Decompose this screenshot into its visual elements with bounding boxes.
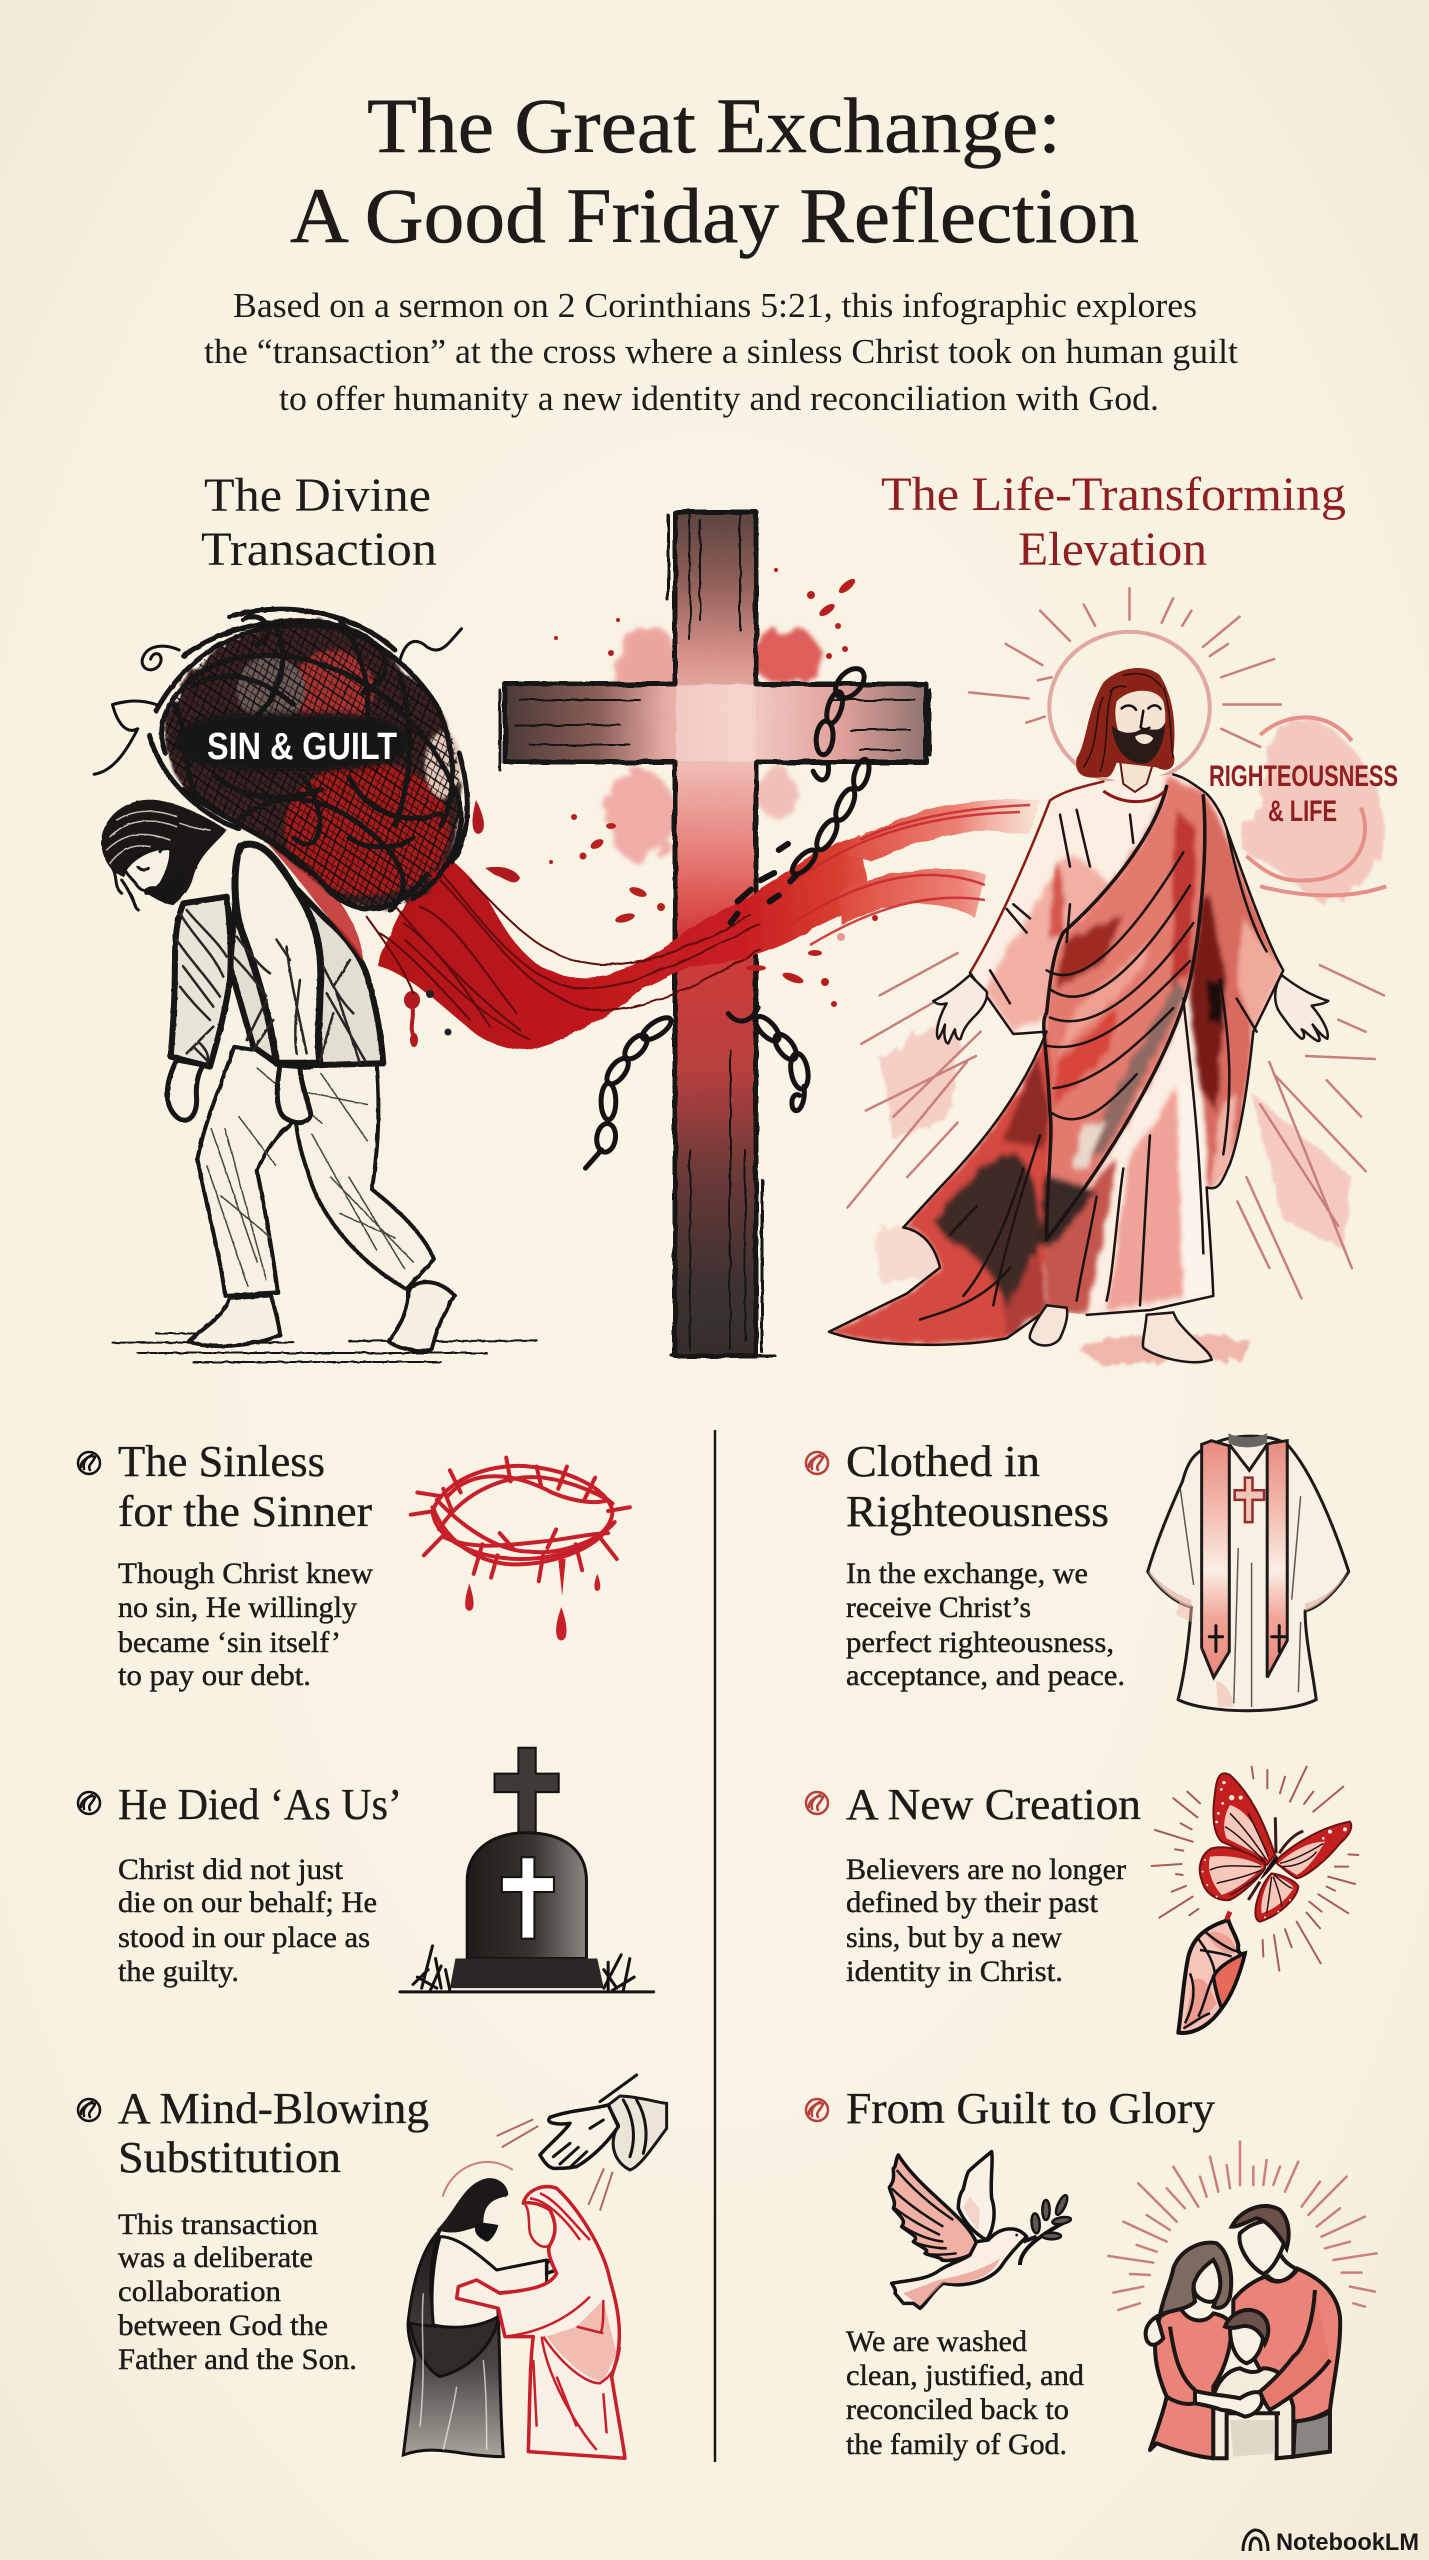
icon: tombstone with cross [400, 1748, 654, 1992]
far sleeve [171, 897, 231, 1067]
upper pale ribbon [840, 799, 1040, 862]
point: He Died As Us: the guilty. [118, 1955, 239, 1988]
finger and cuff lines [553, 2075, 646, 2167]
intro text block [204, 286, 1238, 418]
beard [147, 863, 184, 905]
child hair [1225, 2310, 1268, 2343]
woman hair [1160, 2243, 1231, 2315]
rays [848, 588, 1384, 1298]
chest cross [1235, 1478, 1264, 1522]
beard [1112, 723, 1165, 764]
chrysalis [1178, 1920, 1245, 2033]
loose threads [94, 629, 461, 774]
sash [1045, 777, 1204, 1239]
face [1115, 691, 1165, 751]
body and tail [892, 2229, 1027, 2308]
halo, rays and washes [848, 588, 1386, 1365]
bullet icon [806, 1792, 828, 1814]
stream wash [377, 835, 870, 1050]
ground lines [113, 1334, 537, 1362]
panel: right column points [806, 1437, 1215, 2461]
center divider [714, 1430, 716, 2462]
neckline [1229, 1444, 1267, 1470]
woman hand on man's shoulder [1146, 2317, 1163, 2345]
point: He Died As Us: stood in our place as [118, 1921, 370, 1954]
neck [1120, 760, 1153, 792]
facial features [1122, 705, 1161, 729]
hair strands [1083, 674, 1173, 772]
point: A Mind-Blowing Substitution: This transaction [118, 2208, 318, 2241]
veins [1210, 1813, 1323, 1913]
painted robe [823, 767, 1297, 1353]
wing spots [1202, 1781, 1347, 1918]
point: He Died As Us: Christ did not just [118, 1853, 344, 1886]
point: The Sinless for the Sinner: to pay our debt. [118, 1659, 311, 1692]
point: He Died As Us [78, 1780, 402, 1988]
man hair [1232, 2206, 1289, 2248]
stole left [1202, 1441, 1229, 1677]
train [829, 1032, 1051, 1345]
point: A Mind-Blowing Substitution: A Mind-Blowing [118, 2084, 429, 2133]
reaching hand [540, 2105, 618, 2168]
woman arm [1167, 2327, 1195, 2404]
point: The Sinless for the Sinner: Though Christ knew [118, 1557, 373, 1590]
motion strokes [497, 2119, 613, 2211]
stream over the shoulder [260, 835, 517, 1027]
eye [1015, 2234, 1018, 2236]
point: A Mind-Blowing Substitution: Father and the Son. [118, 2343, 357, 2376]
point: A New Creation: defined by their past [846, 1886, 1099, 1919]
robe ink lines [829, 774, 1283, 1345]
stole crosses [1209, 1626, 1286, 1652]
far hand on shoulder [547, 2245, 590, 2273]
woman face [1194, 2260, 1220, 2302]
heading: The Divine Transaction: The Divine [204, 469, 431, 522]
left hand [933, 975, 987, 1043]
point: He Died As Us: He Died ‘As Us’ [118, 1780, 402, 1829]
title: The Great Exchange: [367, 82, 1061, 169]
intro text block: Based on a sermon on 2 Corinthians 5:21, this infographic explores [233, 286, 1197, 325]
title [290, 82, 1139, 259]
halo [1049, 632, 1210, 783]
feet [189, 1295, 280, 1346]
chain: upper right [731, 663, 872, 923]
stream ink lines [390, 850, 760, 1040]
icon: hand from above with two embracing figures [403, 2075, 667, 2458]
neckline [1103, 791, 1165, 802]
point: A New Creation: identity in Christ. [846, 1955, 1063, 1988]
upper-right wing [1277, 1822, 1351, 1878]
halo arc [443, 2162, 513, 2197]
near wing [889, 2155, 977, 2260]
red figure wash [547, 2300, 617, 2382]
point: The Sinless for the Sinner: no sin, He willingly [118, 1591, 357, 1624]
point: The Sinless for the Sinner: The Sinless [118, 1437, 325, 1486]
feather lines [892, 2170, 957, 2255]
logo mark [1243, 2530, 1268, 2551]
point: The Sinless for the Sinner [78, 1437, 373, 1692]
heading: The Divine Transaction: Transaction [201, 523, 437, 576]
point: Clothed in Righteousness [806, 1437, 1125, 1692]
dark mantle [403, 2230, 503, 2457]
point: A Mind-Blowing Substitution: between God the [118, 2309, 328, 2342]
lower pale ribbon [838, 869, 985, 925]
point: From Guilt to Glory: From Guilt to Glory [846, 2084, 1215, 2133]
illustration: weary figure carrying sin and guilt [94, 609, 537, 1362]
icon: crown of thorns [411, 1458, 630, 1640]
swirl strokes [1246, 717, 1386, 895]
near sleeve [235, 844, 321, 1063]
tunic and arm [432, 2237, 547, 2327]
point: A Mind-Blowing Substitution: Substitution [118, 2133, 341, 2182]
man trousers [1293, 2412, 1330, 2457]
back leg [197, 1047, 312, 1295]
red figure face outline [525, 2205, 550, 2247]
far wing [958, 2152, 994, 2240]
point: A New Creation: sins, but by a new [846, 1921, 1062, 1954]
point: From Guilt to Glory: We are washed [846, 2325, 1027, 2358]
label: SIN & GUILT: SIN & GUILT [207, 726, 397, 768]
logo: NotebookLM: NotebookLM [1276, 2529, 1419, 2556]
body back [230, 847, 383, 1065]
olive branch [1020, 2219, 1070, 2265]
red fold lines [505, 2193, 620, 2450]
rays [1152, 1767, 1358, 1971]
near hand [277, 1065, 311, 1123]
illustration: broken chains on the cross [585, 663, 872, 1168]
child face [1230, 2320, 1263, 2363]
chain: lower right [728, 1008, 811, 1111]
point: The Sinless for the Sinner: for the Sinner [118, 1487, 372, 1536]
point: A New Creation: Believers are no longer [846, 1853, 1126, 1886]
woman dress [1150, 2309, 1231, 2458]
illustration: risen Christ in red robe [823, 588, 1386, 1365]
wash: glow and rays [875, 717, 1384, 1365]
point: Clothed in Righteousness: acceptance, and peace. [846, 1659, 1125, 1692]
lower-left wing [1200, 1847, 1265, 1900]
dark label band [174, 713, 411, 771]
bullet icon [806, 1452, 828, 1474]
right arm [1190, 791, 1283, 1190]
point: A Mind-Blowing Substitution: collaboration [118, 2275, 281, 2308]
bullet icon [78, 1452, 100, 1474]
watercolor wash behind cross [606, 625, 819, 861]
joined hands [1195, 2391, 1262, 2417]
neck line [1267, 2253, 1298, 2281]
label: RIGHTEOUSNESS & LIFE [1209, 760, 1398, 828]
point: From Guilt to Glory: clean, justified, and [846, 2359, 1084, 2392]
facial features [138, 847, 163, 890]
red figure [457, 2187, 625, 2458]
point: From Guilt to Glory: reconciled back to [846, 2393, 1069, 2426]
point: Clothed in Righteousness: Righteousness [846, 1487, 1109, 1536]
point: Clothed in Righteousness: perfect righteousness, [846, 1626, 1114, 1659]
cross beams [500, 512, 930, 1356]
dark hair [437, 2178, 508, 2232]
sleeve [608, 2096, 667, 2170]
leg hatching [207, 1068, 413, 1286]
point: A Mind-Blowing Substitution [78, 2084, 429, 2376]
hair [1076, 668, 1175, 778]
feet [1030, 1305, 1067, 1345]
heading: The Life-Transforming Elevation: Elevation [1018, 523, 1207, 576]
title: A Good Friday Reflection [290, 172, 1139, 259]
point: The Sinless for the Sinner: became ‘sin itself’ [118, 1626, 341, 1659]
body and antennae [1260, 1855, 1278, 1880]
beard [475, 2223, 498, 2242]
intro text block: to offer humanity a new identity and reconciliation with God. [279, 379, 1159, 418]
hair highlights [107, 811, 210, 863]
point: A New Creation: A New Creation [846, 1780, 1141, 1829]
body wash [903, 2258, 1000, 2306]
hair [101, 800, 227, 905]
icon: family embracing in light [1108, 2142, 1377, 2458]
heading: The Divine Transaction [201, 469, 437, 576]
illustration: cross with wash and splatter [500, 512, 930, 1356]
stole right [1267, 1441, 1287, 1677]
icon: white vestment with red stole [1148, 1433, 1349, 1711]
point: A New Creation [806, 1780, 1141, 1988]
shirt hatching [177, 910, 367, 1063]
illustration: red stream flowing from burden to risen Christ [377, 568, 1040, 1050]
figure [823, 668, 1328, 1362]
point: Clothed in Righteousness: In the exchange, we [846, 1557, 1088, 1590]
fold lines [420, 2293, 487, 2450]
far hand [167, 1060, 203, 1120]
man torso [1233, 2268, 1340, 2422]
lower tunic pink streak [1107, 1088, 1183, 1310]
front leg [294, 1062, 434, 1289]
man arm [1260, 2290, 1330, 2410]
upper-left wing [1213, 1773, 1275, 1865]
icon: dove with olive branch [889, 2152, 1071, 2308]
bullet icon [78, 2099, 100, 2121]
heading: The Life-Transforming Elevation: The Life-Transforming [881, 468, 1346, 521]
point: From Guilt to Glory: the family of God. [846, 2428, 1067, 2461]
point: He Died As Us: die on our behalf; He [118, 1886, 377, 1919]
loose hair wisps [112, 867, 138, 910]
hem under drape [1043, 1159, 1117, 1315]
grass [400, 1946, 654, 1992]
bullet icon [78, 1792, 100, 1814]
sleeve and tunic shading [983, 855, 1117, 1032]
point: Clothed in Righteousness: receive Christ’s [846, 1591, 1031, 1624]
panel: left column points [78, 1437, 429, 2376]
icon: butterfly emerging from chrysalis [1152, 1767, 1358, 2033]
man face [1239, 2220, 1287, 2274]
legs and ground [113, 1047, 537, 1362]
child body [1213, 2368, 1293, 2458]
point: Clothed in Righteousness: Clothed in [846, 1437, 1040, 1486]
torso, arms and head [101, 800, 383, 1123]
dark shadow panels [933, 1154, 1040, 1310]
face [125, 848, 171, 891]
intro text block: the “transaction” at the cross where a sinless Christ took on human guilt [204, 332, 1238, 371]
bundle [94, 609, 467, 911]
face [483, 2197, 505, 2227]
right hand [1275, 975, 1328, 1041]
heading: The Life-Transforming Elevation [881, 468, 1346, 576]
mantle fold [410, 2317, 498, 2377]
drips and drops [404, 800, 520, 1047]
lower-right wing [1255, 1873, 1298, 1922]
point: A Mind-Blowing Substitution: was a deliberate [118, 2241, 313, 2274]
point: From Guilt to Glory [806, 2084, 1215, 2461]
splatter [549, 568, 878, 1007]
label: RIGHTEOUSNESS & LIFE: & LIFE [1268, 795, 1337, 828]
chain: lower left [585, 1013, 673, 1168]
rays [1108, 2142, 1377, 2310]
bullet icon [806, 2099, 828, 2121]
